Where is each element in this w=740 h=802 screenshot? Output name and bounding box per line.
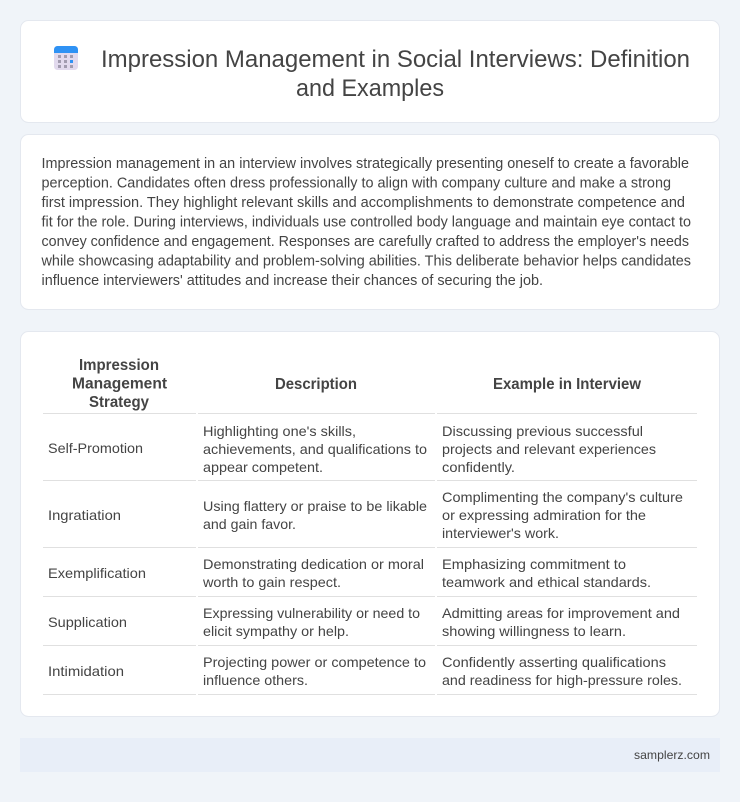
text block: introduction paragraph: while showcasing adaptability and problem-solving abilities. This deliberate behavior helps candidates <box>40 254 691 270</box>
row: exemplification: Exemplification <box>48 565 146 581</box>
text block: introduction paragraph: perception. Candidates often dress professionally to align with company culture and make a strong <box>42 176 671 192</box>
row: ingratiation: Ingratiation <box>48 507 121 523</box>
text block: introduction paragraph: influence interviewers' attitudes and increase their chances of securing the job. <box>42 273 543 289</box>
panel: strategy table <box>20 332 720 716</box>
row: ingratiation: or expressing admiration for the <box>442 507 646 523</box>
row: self-promotion: confidently. <box>442 459 515 475</box>
row: intimidation: Intimidation <box>48 663 124 679</box>
row: supplication: showing willingness to learn. <box>442 623 626 639</box>
row: self-promotion: Self-Promotion <box>48 440 143 456</box>
text block: introduction paragraph: fit for the role. During interviews, individuals use controlled body language and maintain eye contact to <box>42 214 691 230</box>
row: exemplification: teamwork and ethical standards. <box>442 574 651 590</box>
row: supplication: Expressing vulnerability or need to <box>203 605 420 621</box>
text block: introduction paragraph: first impression. They highlight relevant skills and accomplishments to demonstrate competence and <box>42 195 685 211</box>
row: supplication: Admitting areas for improvement and <box>442 605 680 621</box>
row: self-promotion: achievements, and qualifications to <box>203 441 427 457</box>
row: supplication: Supplication <box>48 614 127 630</box>
row: ingratiation: Complimenting the company's culture <box>442 489 683 505</box>
row: supplication: elicit sympathy or help. <box>203 623 349 639</box>
text block: introduction paragraph: Impression management in an interview involves strategically presenting oneself to create a favorable <box>42 156 689 172</box>
row: ingratiation <box>48 489 683 541</box>
row: intimidation: Confidently asserting qualifications <box>442 654 666 670</box>
row: exemplification: worth to gain respect. <box>202 574 341 590</box>
row: ingratiation: Using flattery or praise to be likable <box>203 498 427 514</box>
row: exemplification <box>48 556 651 590</box>
row: exemplification: Demonstrating dedication or moral <box>203 556 424 572</box>
panel: title card <box>20 20 720 122</box>
panel: introduction <box>20 134 720 310</box>
title <box>101 46 690 102</box>
row: ingratiation: interviewer's work. <box>442 525 559 541</box>
title: and Examples <box>296 75 444 102</box>
row: intimidation: Projecting power or competence to <box>203 654 426 670</box>
text block: introduction paragraph <box>40 156 691 289</box>
row: intimidation: and readiness for high-pressure roles. <box>442 672 682 688</box>
row: exemplification: Emphasizing commitment to <box>442 556 626 572</box>
text block: introduction paragraph: convey confidence and engagement. Responses are carefully crafted to address the employer's needs <box>42 234 689 250</box>
row: ingratiation: and gain favor. <box>203 516 296 532</box>
footer bar <box>20 738 720 772</box>
column header: strategy: Management <box>72 376 168 392</box>
column header: strategy: Strategy <box>89 394 149 411</box>
row: self-promotion: appear competent. <box>203 459 323 475</box>
row: intimidation: influence others. <box>203 672 308 688</box>
footer credit: samplerz.com <box>634 748 710 762</box>
column header: description: Description <box>275 376 357 393</box>
column header: strategy <box>72 357 168 411</box>
row: self-promotion: Discussing previous successful <box>442 423 643 439</box>
row: self-promotion: projects and relevant experiences <box>442 441 656 457</box>
title: Impression Management in Social Interviews: Definition <box>101 46 690 73</box>
row: self-promotion <box>48 423 656 475</box>
row: self-promotion: Highlighting one's skills, <box>203 423 356 439</box>
column header: strategy: Impression <box>79 357 159 374</box>
row: supplication <box>48 605 680 639</box>
row: intimidation <box>48 654 682 688</box>
column header: example: Example in Interview <box>493 376 642 393</box>
icon: calendar <box>54 46 78 70</box>
